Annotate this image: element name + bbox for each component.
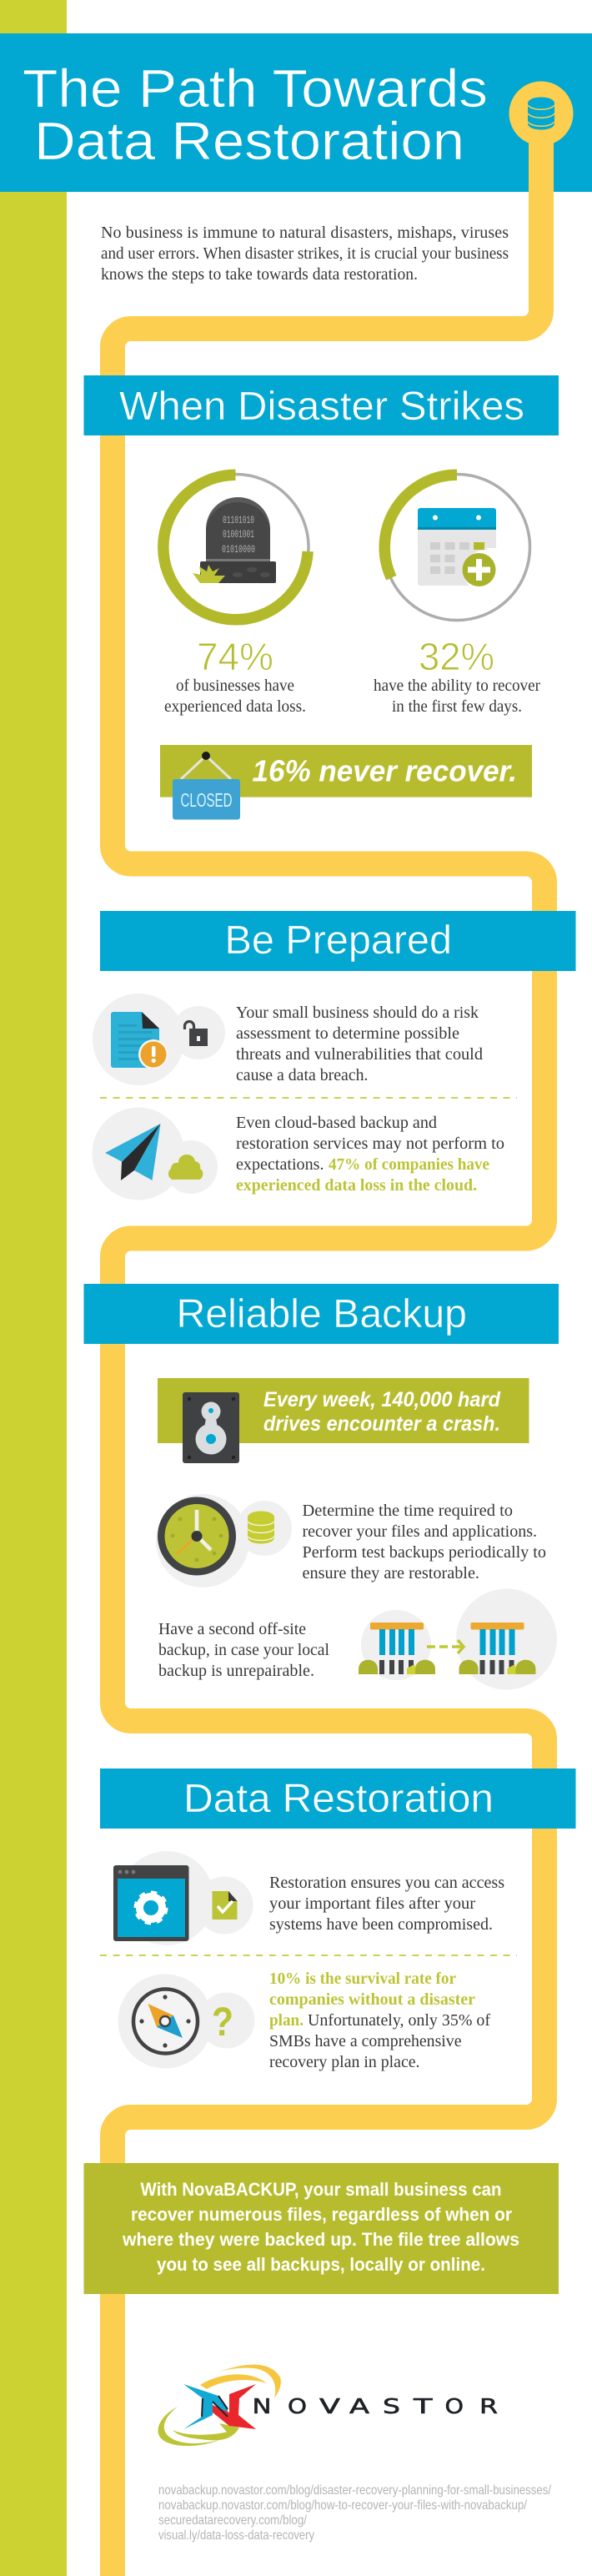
icon: paper plane and cloud <box>92 1108 218 1200</box>
text: survival rate: SMBs have a comprehensive <box>269 2032 462 2050</box>
text: off-site backup <box>158 1620 329 1680</box>
text: risk assessment: cause a data breach. <box>236 1066 369 1084</box>
stat: 32%: 32% <box>419 635 494 678</box>
text: survival rate: 10% is the survival rate for <box>269 1970 456 1988</box>
header band <box>0 33 592 192</box>
donut chart: 74% <box>163 474 309 621</box>
icon: database badge <box>509 82 574 145</box>
logo: NovaStor: S <box>383 2394 400 2418</box>
stat: 32%: have the ability to recover <box>374 677 540 695</box>
icon: two data centers with arrow <box>359 1588 557 1690</box>
callout: NovaBACKUP: you to see all backups, locally or online. <box>157 2254 485 2275</box>
title: The Path Towards <box>23 58 488 118</box>
heading: Reliable Backup: Reliable Backup <box>177 1292 467 1336</box>
text: cloud backup: Even cloud-based backup and <box>236 1114 437 1132</box>
logo: NovaStor: A <box>349 2394 369 2418</box>
icon: compass and question mark: ? <box>212 2000 233 2045</box>
heading: Data Restoration: Data Restoration <box>183 1777 494 1821</box>
icon: settings window and checked file <box>113 1851 253 1945</box>
stat: 32%: in the first few days. <box>392 697 522 716</box>
logo: NovaStor: V <box>319 2394 340 2418</box>
callout: 16% never recover: 16% never recover. <box>252 754 517 788</box>
title: Data Restoration <box>34 111 464 171</box>
icon: clock and coins <box>156 1494 292 1587</box>
left olive side bar <box>0 0 67 2576</box>
logo: NovaStor: O <box>288 2394 307 2418</box>
sources <box>158 2483 551 2543</box>
text: survival rate: recovery plan in place. <box>269 2053 420 2071</box>
callout: 140,000 hard drives: drives encounter a crash. <box>263 1412 500 1436</box>
callout: NovaBACKUP <box>83 2163 559 2294</box>
stat: 74%: 74% <box>197 635 273 678</box>
icon: document warning and open lock <box>93 994 225 1085</box>
text: test backups: recover your files and applications. <box>302 1522 537 1541</box>
sources: visual.ly/data-loss-data-recovery <box>158 2528 314 2543</box>
donut chart: 32% <box>384 474 530 621</box>
stat: 74%: experienced data loss. <box>164 697 306 716</box>
text: risk assessment: threats and vulnerabilities that could <box>236 1045 483 1064</box>
icon: calendar <box>418 508 496 591</box>
text: restoration: Restoration ensures you can access <box>269 1874 504 1892</box>
logo: NovaStor <box>158 2365 498 2446</box>
callout: NovaBACKUP: With NovaBACKUP, your small business can <box>140 2179 502 2200</box>
icon: compass and question mark <box>118 1974 255 2069</box>
icon: hard drive <box>183 1392 239 1463</box>
text: restoration <box>269 1874 504 1934</box>
stat: 74% <box>164 635 306 716</box>
icon: gravestone: 01010000 <box>222 543 255 556</box>
logo: NovaStor: T <box>413 2394 434 2418</box>
sources: securedatarecovery.com/blog/ <box>158 2513 307 2528</box>
text: test backups: Perform test backups periodically to <box>302 1543 546 1562</box>
heading: When Disaster Strikes: When Disaster Strikes <box>119 385 524 429</box>
text: cloud backup: 47% of companies have <box>329 1155 489 1174</box>
text: survival rate: Unfortunately, only 35% of <box>308 2011 490 2030</box>
stat: 74%: of businesses have <box>176 677 294 695</box>
callout: NovaBACKUP: recover numerous files, regardless of when or <box>131 2204 512 2225</box>
icon: gravestone: 01001001 <box>223 528 254 541</box>
title <box>23 58 488 171</box>
intro text: knows the steps to take towards data restoration. <box>101 265 418 284</box>
text: test backups: ensure they are restorable. <box>302 1564 479 1582</box>
text: survival rate: plan. <box>269 2011 304 2030</box>
callout: 16% never recover <box>160 745 532 819</box>
text: test backups: Determine the time required to <box>302 1502 513 1520</box>
text: off-site backup: Have a second off-site <box>158 1620 306 1638</box>
text: cloud backup <box>236 1114 504 1195</box>
text: survival rate: companies without a disaster <box>269 1990 475 2009</box>
heading: Data Restoration <box>100 1768 575 1829</box>
sources: novabackup.novastor.com/blog/how-to-recover-your-files-with-novabackup/ <box>158 2498 527 2513</box>
stat: 32% <box>374 635 540 716</box>
logo: NovaStor: N <box>252 2394 272 2418</box>
text: off-site backup: backup is unrepairable. <box>158 1662 314 1680</box>
logo: NovaStor: O <box>445 2394 464 2418</box>
callout: 140,000 hard drives: Every week, 140,000 hard <box>263 1388 501 1411</box>
icon: gravestone <box>193 497 276 583</box>
intro text: and user errors. When disaster strikes, it is crucial your business <box>101 244 509 263</box>
logo: NovaStor: R <box>479 2394 498 2418</box>
heading: Reliable Backup <box>83 1284 559 1344</box>
text: survival rate <box>269 1970 490 2071</box>
text: restoration: your important files after your <box>269 1894 475 1913</box>
text: cloud backup: restoration services may not perform to <box>236 1135 504 1153</box>
text: cloud backup: expectations. <box>236 1155 324 1174</box>
text: cloud backup: experienced data loss in the cloud. <box>236 1176 477 1195</box>
yellow path ribbon <box>113 113 544 2576</box>
callout: 16% never recover: CLOSED <box>180 789 232 811</box>
text: test backups <box>302 1502 546 1582</box>
text: risk assessment <box>236 1004 483 1084</box>
callout: 140,000 hard drives <box>158 1378 529 1463</box>
heading: Be Prepared <box>100 911 575 971</box>
heading: When Disaster Strikes <box>83 375 559 435</box>
intro text <box>101 224 509 284</box>
callout: NovaBACKUP: where they were backed up. The file tree allows <box>122 2229 519 2250</box>
text: restoration: systems have been compromised. <box>269 1915 493 1934</box>
heading: Be Prepared: Be Prepared <box>225 918 452 963</box>
text: off-site backup: backup, in case your local <box>158 1641 329 1659</box>
text: risk assessment: assessment to determine possible <box>236 1024 459 1043</box>
intro text: No business is immune to natural disasters, mishaps, viruses <box>101 224 509 242</box>
text: risk assessment: Your small business should do a risk <box>236 1004 479 1022</box>
icon: gravestone: 01101010 <box>223 514 254 526</box>
